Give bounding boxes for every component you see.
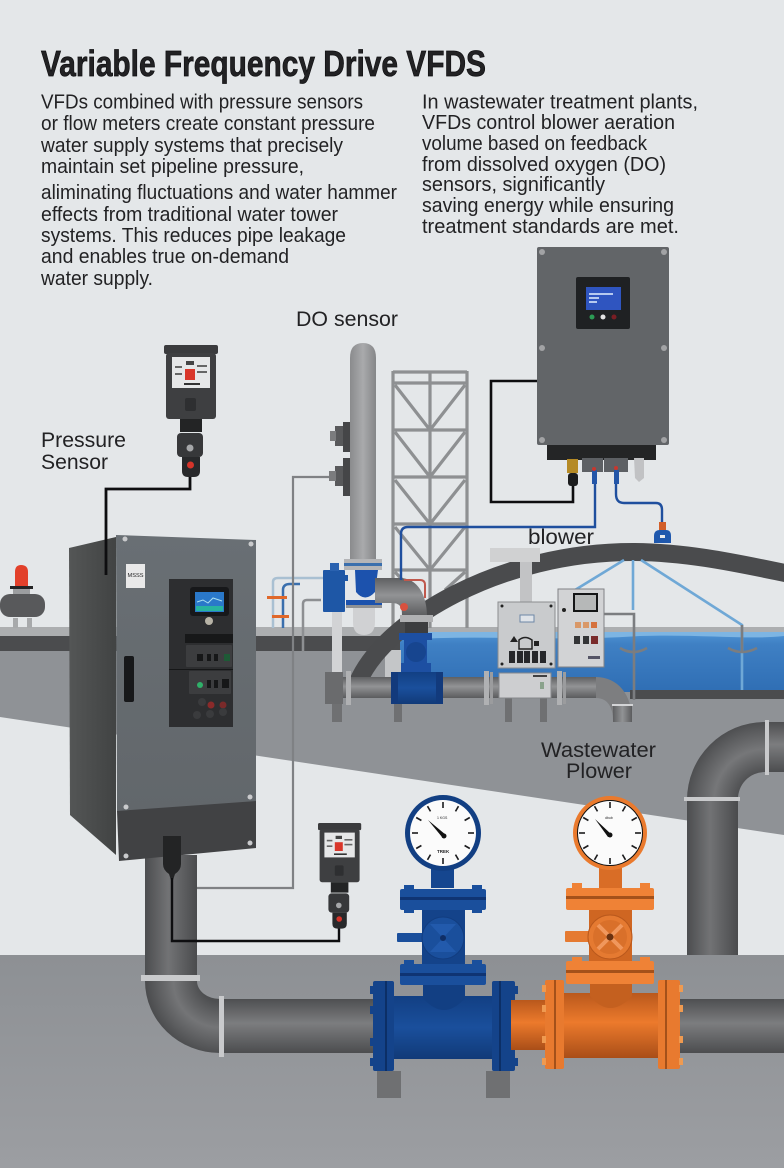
blower support stand xyxy=(490,548,540,602)
main cabinet (VFD) xyxy=(69,535,256,880)
label: Pressure Sensor: Sensor xyxy=(41,451,108,474)
instrument signal wire (grey) xyxy=(185,477,329,888)
blower VFD control cabinet xyxy=(537,247,669,486)
blue wire to dome sensor xyxy=(616,484,662,530)
control module xyxy=(169,579,233,727)
blue pressure gauge and valve xyxy=(370,795,518,1098)
cabinet base xyxy=(117,801,256,861)
vertical column pipe xyxy=(329,343,376,562)
door handle xyxy=(124,656,134,702)
vertical white support and cup xyxy=(332,605,375,674)
text block: right column: saving energy while ensuring xyxy=(422,194,674,217)
text block: left column xyxy=(40,90,397,290)
small instrument tubing with orange clips xyxy=(267,578,323,652)
cabinet door xyxy=(116,535,256,812)
text block: left column: VFDs combined with pressure sensors xyxy=(41,90,363,114)
text block: left column: effects from traditional water tower xyxy=(41,203,338,226)
orange gauge dial: dbub xyxy=(605,816,613,820)
blower cabinet display module xyxy=(576,277,630,329)
blower cabinet bottom connectors xyxy=(547,445,656,486)
aeration tank water xyxy=(385,632,784,699)
blue gauge dial: 1 KGS xyxy=(437,816,448,820)
bottom left elbow pipe xyxy=(141,855,380,1057)
orange gauge dial xyxy=(573,796,647,870)
blue wire to blower valve xyxy=(401,484,595,580)
text block: left column: systems. This reduces pipe leakage xyxy=(41,224,346,247)
icon: dome sensor xyxy=(654,522,671,543)
blue gauge dial xyxy=(405,795,481,871)
cabinet side face xyxy=(69,537,116,855)
text block: left column: maintain set pipeline pressure, xyxy=(41,155,304,178)
label: Pressure Sensor: Pressure xyxy=(41,429,126,452)
horizontal process pipe xyxy=(325,671,633,722)
steel lattice tower xyxy=(393,371,467,628)
wire from bottom sensor to cabinet xyxy=(172,878,339,941)
text block: right column: VFDs control blower aeration xyxy=(422,111,675,134)
flange and blue valve on column xyxy=(344,559,382,608)
icon: top pressure sensor xyxy=(164,345,218,477)
text block: left column: or flow meters create constant pressure xyxy=(41,112,375,135)
label: blower: blower xyxy=(528,526,594,549)
label: Pressure Sensor xyxy=(41,429,126,474)
mixers xyxy=(604,614,757,700)
left beacon on capsule xyxy=(0,565,45,628)
mid blue gate valve xyxy=(391,633,443,704)
text block: right column: In wastewater treatment plants, xyxy=(422,90,698,114)
junction box below panels xyxy=(499,673,551,698)
text block: left column: water supply. xyxy=(40,267,153,290)
blue junction box xyxy=(323,563,348,612)
blower cabinet body xyxy=(537,247,669,445)
control panel A xyxy=(498,602,555,668)
scene: ground bands xyxy=(0,627,784,1168)
text block: right column: sensors, significantly xyxy=(422,173,606,196)
text block: right column: from dissolved oxygen (DO) xyxy=(422,153,666,176)
nameplate: MSSS xyxy=(128,573,144,579)
text block: right column: treatment standards are met. xyxy=(422,215,679,238)
orange pressure gauge and valve xyxy=(511,796,683,1069)
blue gauge dial: TREK xyxy=(437,849,450,854)
wire from top pressure sensor to cabinet xyxy=(106,476,190,575)
text block: right column: volume based on feedback xyxy=(422,132,648,155)
label: Wastewater Plower xyxy=(541,739,656,783)
air diffuser lines xyxy=(575,560,742,690)
label: Wastewater Plower: Wastewater xyxy=(541,739,656,762)
icon: bottom pressure sensor xyxy=(318,823,361,929)
dome: curved tank roof xyxy=(358,552,784,682)
big right elbow pipe xyxy=(684,720,784,955)
text block: left column: water supply systems that precisely xyxy=(40,134,344,157)
text block: left column: and enables true on-demand xyxy=(41,245,289,268)
label: DO sensor: DO sensor xyxy=(296,308,398,331)
text block: right column xyxy=(422,90,698,238)
control panel B xyxy=(558,589,604,667)
right outlet pipe xyxy=(675,999,784,1053)
black wire: blower cabinet loop xyxy=(491,381,573,502)
label: Wastewater Plower: Plower xyxy=(566,760,632,783)
text block: left column: aliminating fluctuations and water hammer xyxy=(41,181,397,204)
grey elbow and red instrument xyxy=(375,578,433,633)
title: Variable Frequency Drive VFDS xyxy=(41,43,486,84)
nameplate xyxy=(126,564,145,588)
black cable gland xyxy=(163,836,181,880)
